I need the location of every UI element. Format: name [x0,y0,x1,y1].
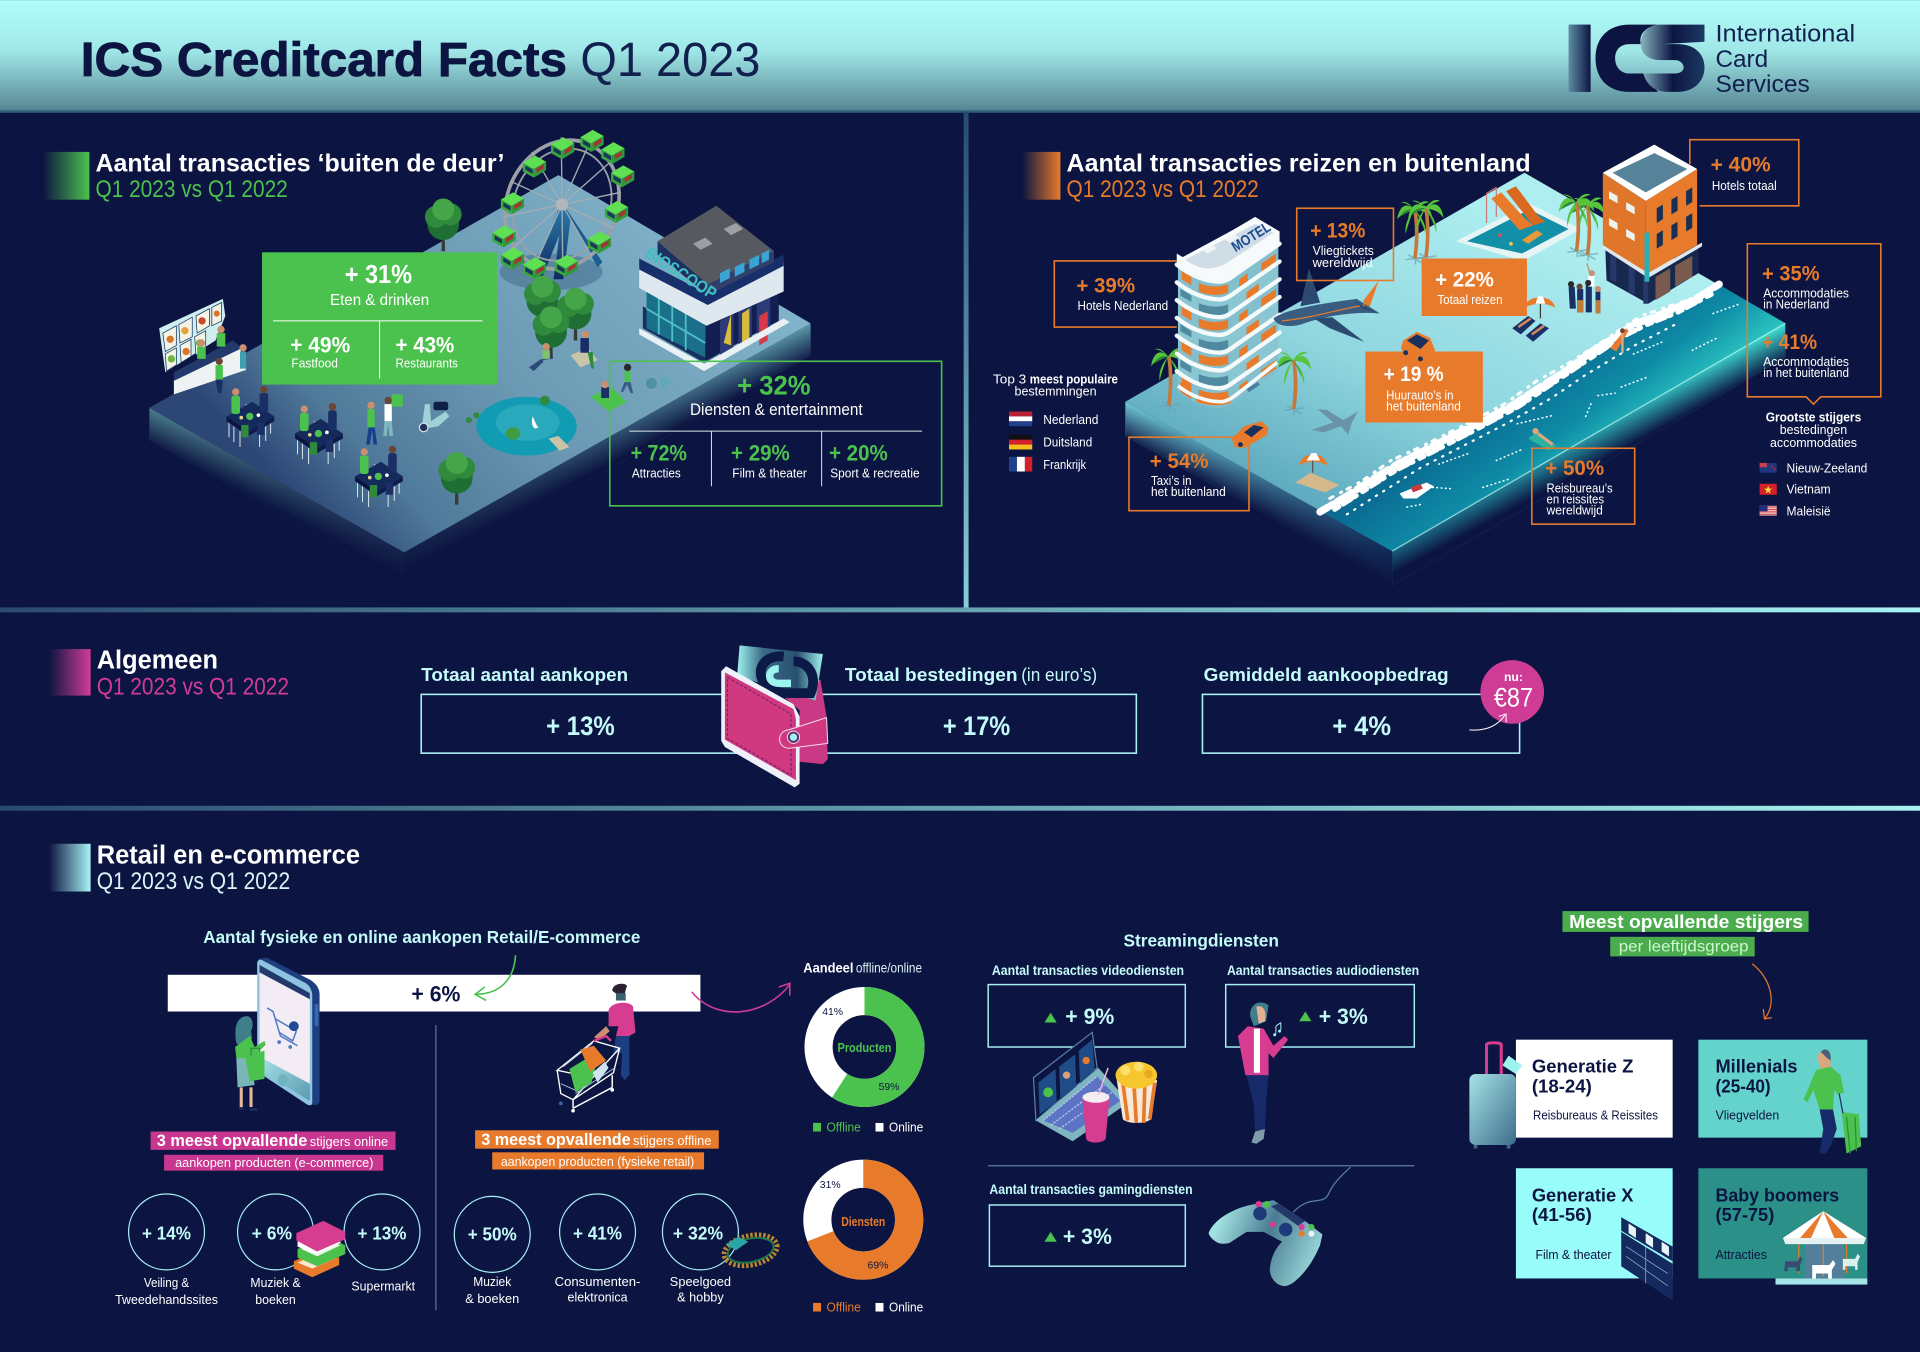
callout: eten en drinken: + 31% [345,261,412,289]
icon: suitcase [1469,1043,1522,1149]
stat: gamingdiensten [989,1182,1193,1266]
chart: share producten [803,960,923,1135]
stat: online percentages and labels: + 13% [358,1222,407,1243]
separator line [988,1165,1414,1167]
illustration: jet ski and swimmers [1400,328,1629,498]
callout: totaal reizen: Totaal reizen [1438,292,1502,307]
heading: streamingdiensten: Streamingdiensten [1123,931,1279,951]
icon: flag Germany [1009,435,1032,449]
badge: nu €87: €87 [1494,683,1533,713]
bar: plus 6 procent [168,975,700,1012]
card: baby boomers [1698,1168,1867,1285]
stat: videodiensten [988,963,1185,1047]
illustration: trees [425,198,594,505]
heading: algemeen [49,647,289,700]
badge: nu €87 [1480,660,1544,724]
illustration: cinema building: BIOSCOOP [642,243,721,303]
stat: offline percentages and labels: Consumenten- [555,1274,640,1289]
illustration: motel tower: MOTEL [1229,219,1274,256]
stat: gemiddeld aankoopbedrag: Gemiddeld aankoopbedrag [1204,664,1449,685]
icon: man with luggage [1804,1050,1861,1154]
callout: vliegtickets [1297,208,1393,280]
callout: eten en drinken: Fastfood [291,355,338,370]
illustration: park visitors [529,331,670,412]
callout: diensten en entertainment: + 72% [631,440,687,465]
illustration: restaurant tables [227,386,403,507]
card: millennials: Millenials [1716,1056,1798,1077]
callout: taxi's: + 54% [1150,449,1209,473]
callout: accommodaties: + 41% [1762,330,1817,354]
arrow: badge to box [1469,714,1506,730]
callout: accommodaties: in Nederland [1763,297,1829,312]
card: generatie X: Generatie X [1532,1184,1634,1205]
callout: diensten en entertainment [610,361,942,506]
stat: offline percentages and labels: Muziek [473,1274,512,1289]
stat: totaal aantal aankopen [421,664,628,741]
chart: share producten: 59% [879,1082,899,1093]
callout: totaal reizen: + 22% [1435,268,1494,292]
illustration: rental car [1401,332,1435,361]
callout: diensten en entertainment: Sport & recreatie [830,466,920,481]
callout: taxi's [1129,437,1249,511]
icon: flag France [1009,457,1032,472]
label: online stijgers: stijgers online [310,1134,388,1149]
callout: accommodaties: Accommodaties [1763,286,1849,301]
legend: grootste stijgers [1760,409,1867,519]
card: millennials [1698,1040,1867,1154]
stat: audiodiensten: Aantal transacties audiodiensten [1227,963,1419,978]
chart: share producten: 41% [822,1007,843,1018]
illustration: cinema building [639,206,790,371]
label: offline stijgers: aankopen producten (fysieke retail) [501,1154,694,1169]
stat: offline percentages and labels [465,1222,731,1306]
illustration: food stall [159,299,247,394]
icon: carousel [1776,1211,1867,1285]
label: offline stijgers: 3 meest opvallende [481,1130,631,1149]
heading: retail: Q1 2023 vs Q1 2022 [97,868,290,895]
title [81,33,760,87]
icon: phone with shopper [235,958,320,1109]
stat: offline percentages and labels: & boeken [465,1291,519,1306]
stat: gemiddeld aankoopbedrag: + 4% [1332,711,1391,741]
heading: meest opvallende stijgers [1562,911,1809,956]
illustration: airplane [1273,268,1380,342]
legend: top 3 bestemmingen: Top 3 [993,371,1026,386]
callout: hotels nederland: Hotels Nederland [1078,298,1168,313]
label: online stijgers: aankopen producten (e-commerce) [175,1155,373,1170]
stat: online percentages and labels [115,1222,416,1307]
illustration: pond [466,396,577,456]
stat: totaal bestedingen: + 17% [943,711,1010,741]
stat: offline percentages and labels: + 41% [573,1222,622,1243]
isometric platform: park [149,175,811,584]
callout: vliegtickets: wereldwijd [1312,255,1373,270]
section dividers [0,112,1920,811]
card: generatie X: (41-56) [1532,1204,1592,1225]
card: baby boomers: (57-75) [1716,1204,1774,1225]
callout: totaal reizen [1422,258,1527,316]
callout: diensten en entertainment: Film & theater [732,466,808,481]
callout: huurauto's: + 19 % [1384,362,1444,386]
logo wordmark: Services [1716,71,1810,98]
chart: share producten: Producten [838,1040,892,1055]
stat: totaal aantal aankopen: Totaal aantal aankopen [421,664,628,685]
card: generatie Z: Reisbureaus & Reissites [1533,1107,1658,1122]
icon: flag Vietnam [1760,484,1777,495]
box: totaal aantal aankopen and bestedingen [421,694,1136,753]
chart: share diensten: 31% [820,1180,841,1191]
chart: share diensten: Diensten [841,1214,885,1229]
label: online stijgers: 3 meest opvallende [157,1131,307,1150]
label: offline stijgers: stijgers offline [633,1133,711,1148]
arrow: pink to share [692,983,790,1012]
legend: grootste stijgers: accommodaties [1770,435,1857,450]
stat: totaal bestedingen: Totaal bestedingen [845,664,1018,685]
callout: hotels totaal: + 40% [1711,153,1771,177]
illustration: ferris wheel [485,122,639,290]
callout: accommodaties: Accommodaties [1763,354,1849,369]
title: ICS Creditcard Facts [81,33,567,87]
callout: accommodaties: in het buitenland [1763,365,1849,380]
arrow: to age groups [1752,964,1772,1019]
legend: grootste stijgers: Maleisië [1787,504,1831,519]
callout: diensten en entertainment: + 29% [731,440,790,465]
stat: offline percentages and labels: + 50% [468,1223,517,1244]
legend: top 3 bestemmingen: Duitsland [1043,434,1092,449]
card: millennials: Vliegvelden [1716,1107,1779,1122]
title: Q1 2023 [580,33,760,87]
stat: audiodiensten: + 3% [1319,1004,1368,1029]
heading: retail: Retail en e-commerce [97,841,360,869]
illustration: pool with slides [1456,186,1581,261]
icon: flag Malaysia [1760,506,1777,516]
callout: diensten en entertainment: Attracties [632,466,681,481]
chart: share diensten [813,1174,923,1315]
stat: online percentages and labels: Veiling & [144,1275,190,1290]
callout: accommodaties: + 35% [1762,261,1820,285]
stat: offline percentages and labels: + 32% [673,1222,723,1243]
callout: huurauto's [1365,352,1483,423]
legend: grootste stijgers: Grootste stijgers [1766,409,1861,424]
callout: reisbureau's: en reissites [1547,491,1604,506]
legend: top 3 bestemmingen: meest populaire [1030,371,1118,386]
stat: online percentages and labels: + 14% [142,1222,191,1243]
card: generatie Z: (18-24) [1532,1075,1592,1096]
legend: grootste stijgers: Vietnam [1787,482,1831,497]
callout: hotels nederland: + 39% [1076,274,1135,298]
callout: eten en drinken: Restaurants [396,355,458,370]
figure: woman with bag [235,1016,266,1109]
stat: videodiensten: Aantal transacties videodiensten [992,963,1184,978]
callout: hotels totaal [1690,140,1799,206]
stat: offline percentages and labels: & hobby [677,1290,724,1305]
stat: online percentages and labels: Muziek & [250,1275,301,1290]
icon: shopper with cart [557,984,636,1113]
illustration: delivery and scooter [366,394,449,445]
callout: reisbureau's: + 50% [1545,456,1604,480]
heading: buiten de deur: Q1 2023 vs Q1 2022 [96,176,288,203]
legend: top 3 bestemmingen: Nederland [1043,412,1098,427]
callout: diensten en entertainment: + 32% [737,370,811,400]
card: generatie X [1516,1168,1673,1300]
vertical divider online offline [435,1025,437,1310]
legend: top 3 bestemmingen [993,371,1118,472]
card: generatie Z: Generatie Z [1532,1056,1633,1077]
chart: share diensten: 69% [868,1261,888,1272]
callout: eten en drinken: + 49% [290,333,351,358]
icon: flag Netherlands [1009,412,1032,426]
icon: books [294,1221,345,1277]
legend: top 3 bestemmingen: Frankrijk [1043,457,1087,472]
illustration: orange hotel [1603,145,1702,304]
icon: wallet [721,645,828,787]
callout: taxi's: Taxi’s in [1151,473,1191,488]
icon: clapperboard [1621,1217,1673,1300]
callout: accommodaties [1747,244,1881,404]
stat circles online [129,1194,420,1270]
callout: eten en drinken: Eten & drinken [330,292,429,309]
legend: grootste stijgers: Nieuw-Zeeland [1787,461,1867,476]
illustration: beach loungers [1296,296,1555,492]
icon: flag New Zealand [1760,463,1777,473]
callout: vliegtickets: + 13% [1310,219,1365,243]
illustration: plane shadow [1311,409,1358,435]
heading: buiten de deur [43,150,504,203]
heading: reizen en buitenland: Q1 2023 vs Q1 2022 [1067,176,1259,203]
callout: reisbureau's: Reisbureau’s [1547,480,1613,495]
heading: reizen en buitenland [1022,150,1531,203]
chart: share producten: offline/online [856,960,922,975]
illustration: taxi [1232,421,1269,448]
label: offline stijgers [475,1130,719,1169]
stat: gamingdiensten: + 3% [1063,1224,1112,1249]
stat: gamingdiensten: Aantal transacties gamingdiensten [989,1182,1193,1197]
stat: videodiensten: + 9% [1065,1004,1115,1029]
panel: reizen en buitenland [993,140,1881,585]
illustration: tour group [1568,263,1601,314]
chart: share producten: Aandeel [803,960,853,975]
illustration: motel tower [1177,217,1280,408]
isometric platform: beach [1125,173,1785,585]
stat circles offline [454,1194,738,1272]
callout: reisbureau's [1532,448,1635,524]
callout: reisbureau's: wereldwijd [1546,502,1603,517]
stat: totaal aantal aankopen: + 13% [546,711,615,741]
heading: reizen en buitenland: Aantal transacties reizen en buitenland [1067,150,1531,178]
subheading: aankopen: Aantal fysieke en online aankopen Retail/E-commerce [203,927,641,947]
legend: grootste stijgers: bestedingen [1780,422,1847,437]
panel: algemeen [49,645,1544,787]
illustration: surf foam [1320,284,1740,514]
icon: woman with headphones [1238,1003,1288,1144]
bar: plus 6 procent: + 6% [411,982,461,1007]
stat: gemiddeld aankoopbedrag [1202,664,1520,753]
callout: taxi's: het buitenland [1151,484,1226,499]
header band [0,0,1920,113]
callout: hotels nederland [1054,261,1177,327]
stat: online percentages and labels: boeken [255,1292,296,1307]
icon: toy train track [721,1230,780,1270]
chart: share producten: Online [889,1120,923,1135]
heading: buiten de deur: Aantal transacties ‘buiten de deur’ [96,150,504,178]
arrow: green to bar [475,955,516,1000]
callout: hotels totaal: Hotels totaal [1712,178,1777,193]
panel: retail en e-commerce [49,841,1867,1315]
callout: eten en drinken [262,252,497,385]
heading: algemeen: Algemeen [97,647,218,675]
heading: algemeen: Q1 2023 vs Q1 2022 [97,673,289,700]
stat: totaal bestedingen: (in euro’s) [1021,664,1097,685]
heading: meest opvallende stijgers: per leeftijdsgroep [1619,939,1749,956]
callout: diensten en entertainment: + 20% [829,440,888,465]
card: baby boomers: Attracties [1716,1247,1767,1262]
logo wordmark: International [1716,21,1855,48]
callout: huurauto's: Huurauto’s in [1386,387,1453,402]
label: online stijgers [151,1131,396,1171]
stat: totaal bestedingen [845,664,1097,741]
heading: retail [49,841,360,895]
icon: game controller [1209,1167,1351,1286]
stat: offline percentages and labels: Speelgoed [670,1274,731,1289]
callout: vliegtickets: Vliegtickets [1313,243,1374,258]
legend: top 3 bestemmingen: bestemmingen [1014,384,1097,399]
panel: buiten de deur [43,122,942,584]
logo wordmark [1716,21,1855,98]
chart: share producten: Offline [827,1120,861,1135]
icon: laptop with popcorn and drink [1033,1032,1157,1143]
logo wordmark: Card [1716,46,1768,73]
illustration: palm trees [1151,194,1605,415]
callout: eten en drinken: + 43% [396,333,455,358]
icon: ICS logo [1569,25,1704,92]
card: baby boomers: Baby boomers [1716,1184,1839,1205]
callout: diensten en entertainment: Diensten & entertainment [690,400,863,419]
stat: online percentages and labels: + 6% [252,1222,292,1243]
card: generatie X: Film & theater [1536,1247,1612,1262]
card: generatie Z [1469,1040,1673,1149]
card: millennials: (25-40) [1716,1075,1771,1096]
stat: online percentages and labels: Supermarkt [351,1279,416,1294]
badge: nu €87: nu: [1504,670,1523,684]
chart: share diensten: Offline [827,1300,861,1315]
callout: huurauto's: het buitenland [1386,398,1461,413]
chart: share diensten: Online [889,1300,923,1315]
heading: meest opvallende stijgers: Meest opvallende stijgers [1569,911,1803,932]
stat: offline percentages and labels: elektronica [568,1290,628,1305]
stat: audiodiensten [1226,963,1419,1047]
stat: online percentages and labels: Tweedehandssites [115,1292,218,1307]
